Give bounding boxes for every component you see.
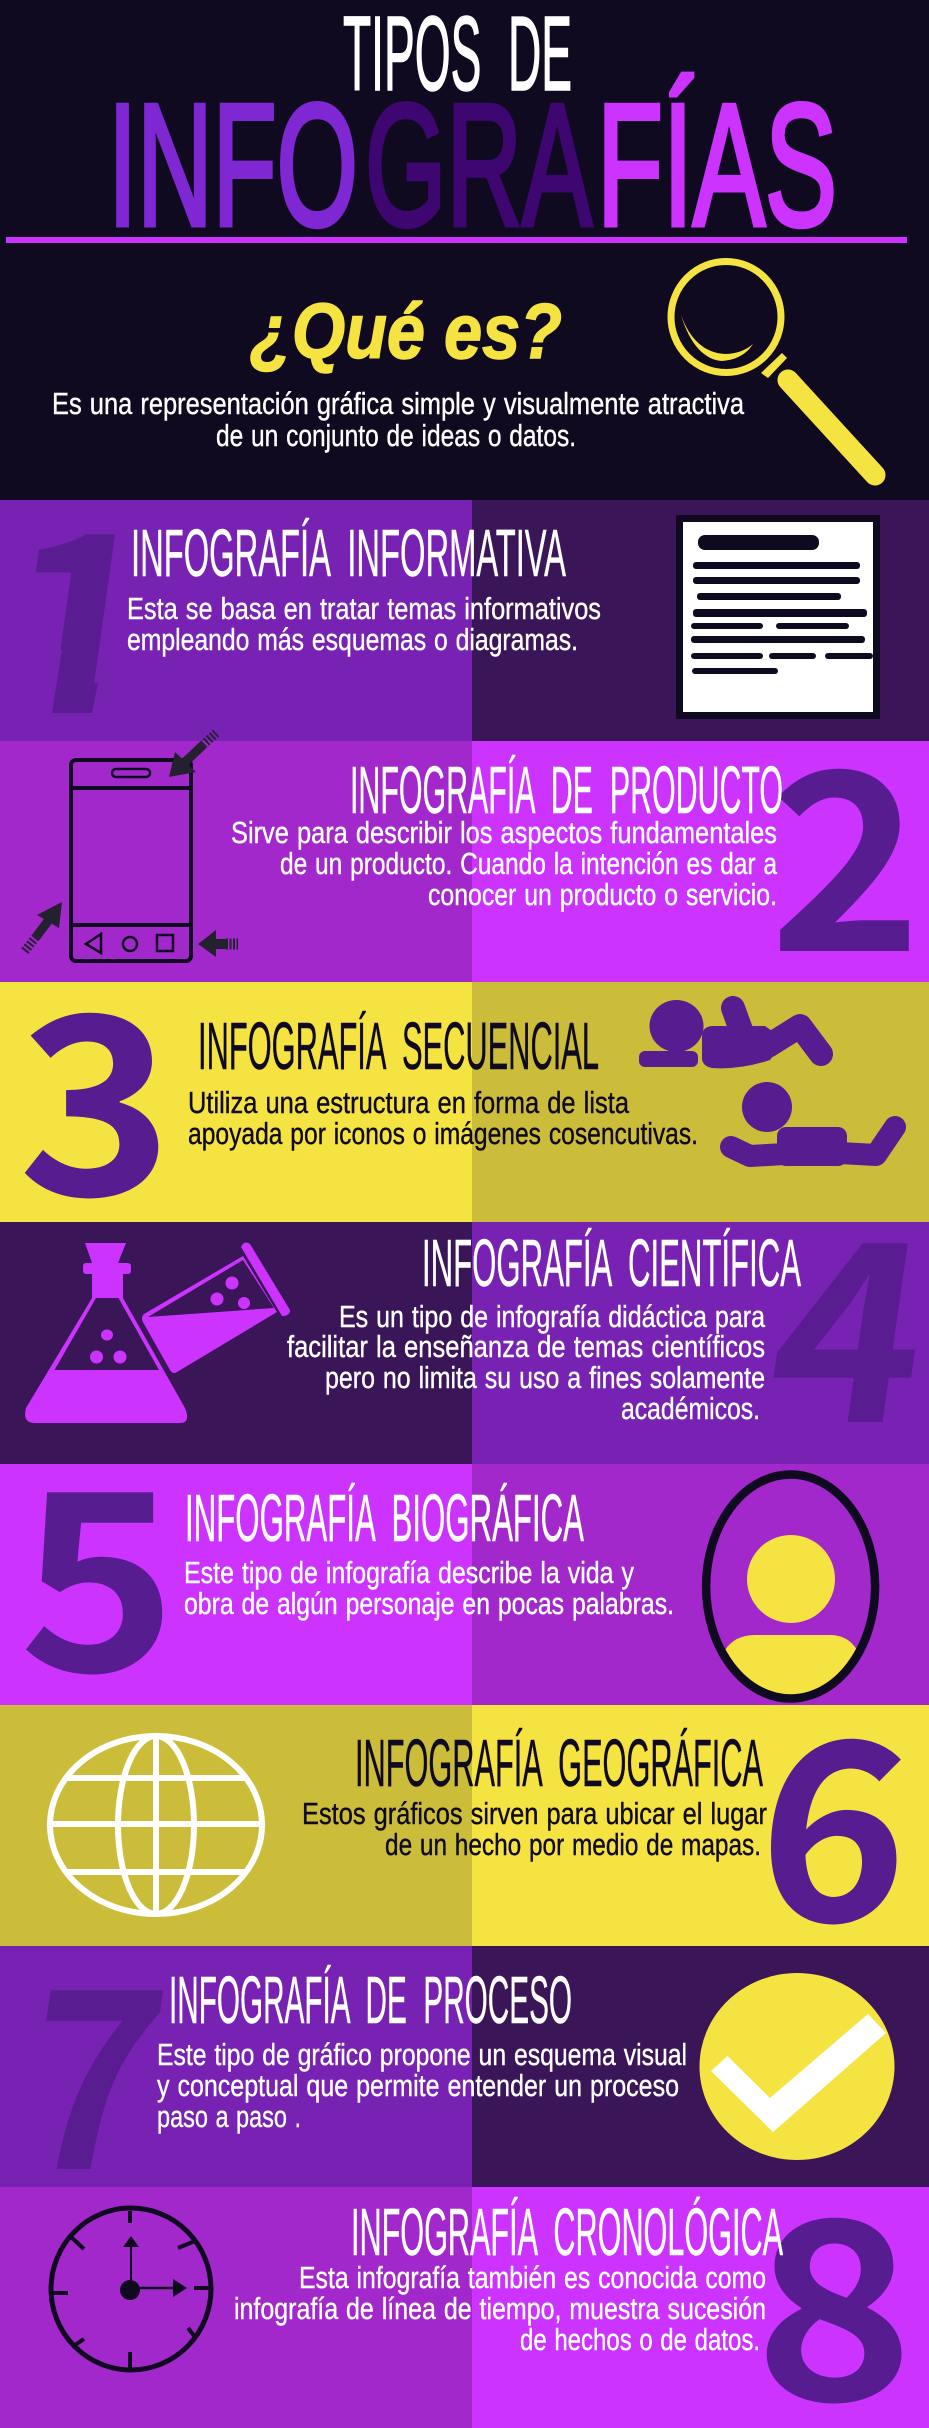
heading: qué es: ¿Qué es? (250, 287, 562, 375)
icon: sleeping figures (639, 1000, 895, 1166)
panel: header (0, 0, 929, 500)
body text (231, 815, 778, 912)
body text: facilitar la enseñanza de temas científicos (287, 1329, 765, 1364)
body text: Utiliza una estructura en forma de lista (188, 1085, 630, 1120)
description text: de un conjunto de ideas o datos. (216, 418, 576, 453)
icon: globe (50, 1736, 262, 1914)
body text: académicos. (621, 1391, 760, 1426)
body text (184, 1555, 674, 1621)
body text (127, 591, 601, 657)
description text (52, 386, 745, 453)
arrows (24, 733, 238, 957)
body text: apoyada por iconos o imágenes cosencutivas. (188, 1116, 698, 1151)
body text: pero no limita su uso a fines solamente (325, 1360, 765, 1395)
panel: 4 científica (0, 1134, 929, 1494)
title: infografías: INFO (108, 67, 358, 262)
icon: clock (51, 2208, 211, 2370)
panel: 5 biográfica (0, 1384, 929, 1743)
body text: Es un tipo de infografía didáctica para (339, 1299, 766, 1334)
panel: 7 proceso (0, 1881, 929, 2241)
panel: 6 geográfica (0, 1633, 929, 1993)
panel: 8 cronológica (0, 2113, 929, 2428)
number 6: 6 (748, 1633, 923, 1993)
number 2: 2 (769, 664, 922, 1023)
description text: Es una representación gráfica simple y visualmente atractiva (52, 386, 745, 421)
number 3: 3 (18, 908, 173, 1267)
body text: Este tipo de gráfico propone un esquema visual (157, 2037, 687, 2072)
body text: infografía de línea de tiempo, muestra sucesión (234, 2291, 766, 2326)
body text: empleando más esquemas o diagramas. (127, 622, 578, 657)
body text: Este tipo de infografía describe la vida y (184, 1555, 634, 1590)
number 5: 5 (19, 1384, 177, 1743)
title: infografías: GRA (365, 67, 592, 262)
body text: Esta se basa en tratar temas informativos (127, 591, 601, 626)
icon: portrait (706, 1474, 875, 1700)
icon: magnifying glass (671, 262, 875, 475)
icon: document (676, 515, 880, 719)
title: infografías (108, 67, 837, 262)
body text: Esta infografía también es conocida como (299, 2260, 766, 2295)
body text: y conceptual que permite entender un proceso (157, 2068, 679, 2103)
panel: 1 informativa (0, 500, 929, 741)
body text: conocer un producto o servicio. (428, 877, 777, 912)
panel: 2 producto (0, 664, 929, 1023)
panel: 3 secuencial (0, 908, 929, 1267)
title underline (6, 237, 907, 243)
number 7: 7 (4, 1881, 189, 2241)
body text: Sirve para describir los aspectos fundamentales (231, 815, 777, 850)
icon: check mark (700, 1973, 894, 2160)
body text: de hechos o de datos. (520, 2322, 760, 2357)
body text (234, 2260, 766, 2357)
body text: de un hecho por medio de mapas. (385, 1827, 761, 1862)
icon: phone (71, 760, 191, 961)
icon: lab flasks (25, 1243, 290, 1423)
body text (188, 1085, 698, 1151)
body text (157, 2037, 687, 2134)
body text (287, 1299, 766, 1426)
body text: de un producto. Cuando la intención es dar a (280, 846, 778, 881)
body text: obra de algún personaje en pocas palabras. (184, 1586, 674, 1621)
body text (302, 1796, 767, 1862)
body text: paso a paso . (157, 2099, 301, 2134)
body text: Estos gráficos sirven para ubicar el lugar (302, 1796, 767, 1831)
